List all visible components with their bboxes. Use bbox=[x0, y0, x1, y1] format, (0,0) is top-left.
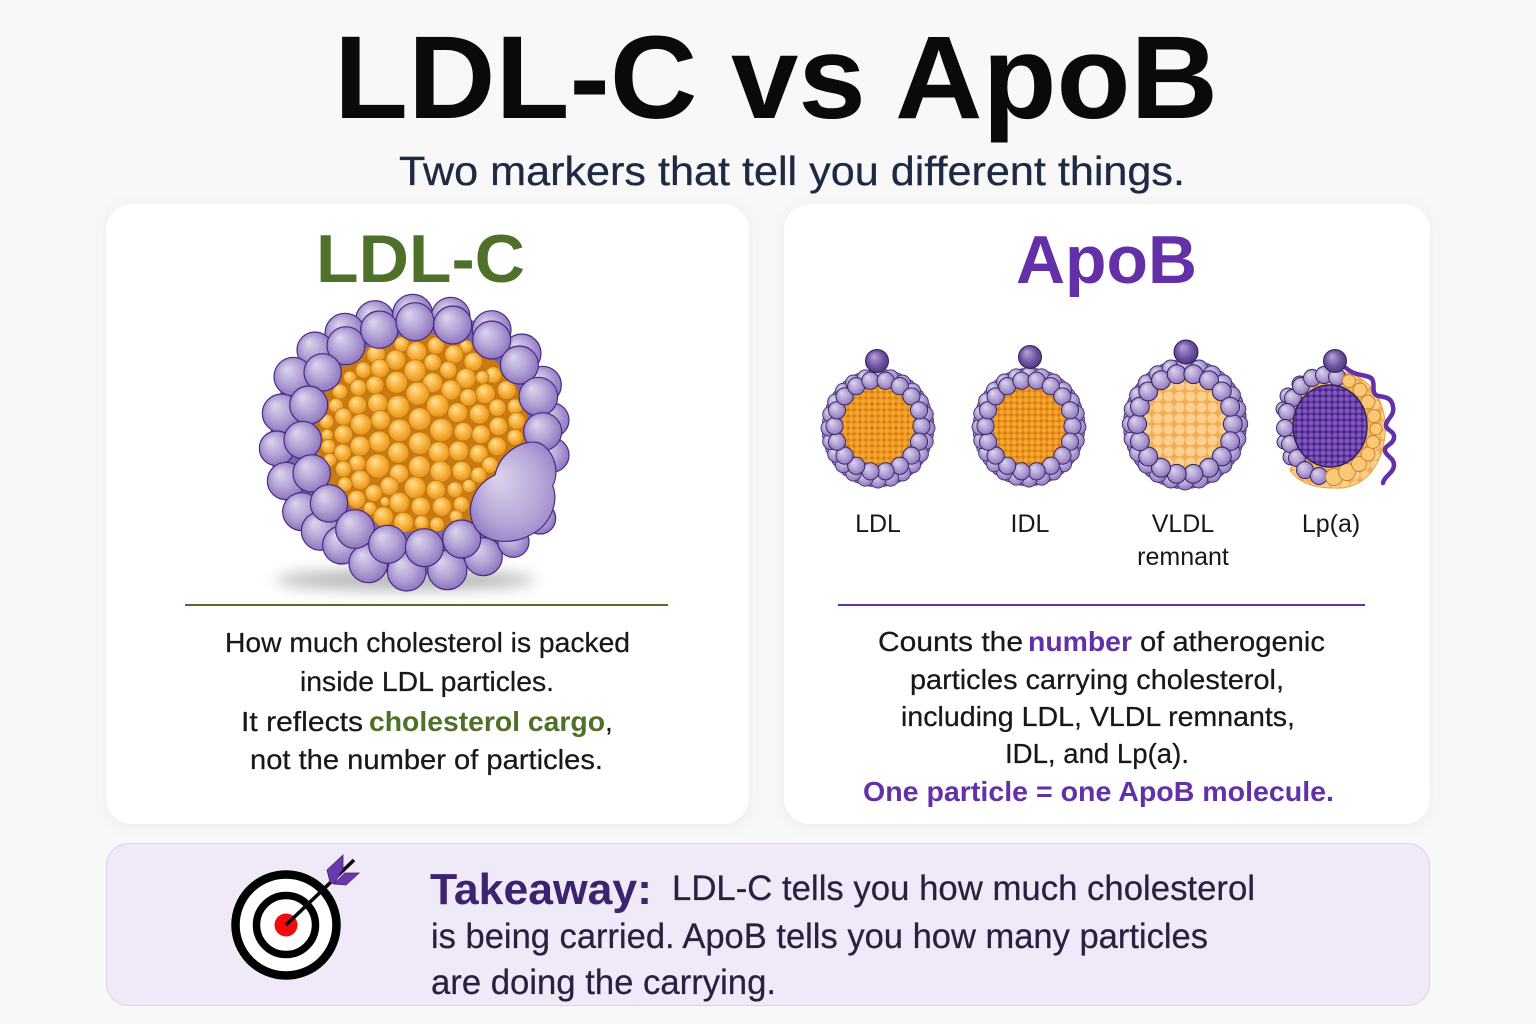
subtitle: Two markers that tell you different things. bbox=[399, 148, 1185, 194]
takeaway text: Takeaway: bbox=[430, 865, 652, 914]
panel heading: LDL-C: LDL-C bbox=[316, 221, 525, 297]
banner background bbox=[106, 844, 1430, 1006]
description: LDL-C: inside LDL particles. bbox=[300, 666, 554, 697]
purple shell bbox=[1276, 366, 1346, 484]
particle backing disc bbox=[270, 308, 557, 575]
title: LDL-C vs ApoB bbox=[334, 12, 1218, 144]
orange cholesterol core bbox=[314, 334, 529, 533]
label: VLDL remnant bbox=[1137, 510, 1229, 571]
ground shadow bbox=[275, 571, 535, 589]
particle: Lp(a) bbox=[1276, 350, 1394, 488]
orange underlay bbox=[1287, 378, 1373, 474]
description: LDL-C: How much cholesterol is packed bbox=[225, 627, 630, 658]
outer phospholipid layer bbox=[259, 294, 569, 591]
orange shell beads bbox=[1326, 374, 1382, 486]
divider line: ApoB bbox=[838, 604, 1365, 606]
apo(a) tail bbox=[1346, 368, 1394, 483]
description: LDL-C bbox=[225, 627, 630, 775]
icon: target with arrow bbox=[236, 855, 359, 976]
takeaway text: are doing the carrying. bbox=[431, 963, 776, 1002]
label: Lp(a): Lp(a) bbox=[1302, 510, 1360, 538]
ApoB protein lobe bbox=[470, 442, 556, 541]
cholesterol balls bbox=[319, 337, 525, 532]
description: LDL-C: not the number of particles. bbox=[250, 744, 603, 775]
description: ApoB: IDL, and Lp(a). bbox=[1005, 738, 1189, 769]
description: ApoB: Counts the bbox=[878, 626, 1023, 657]
label: IDL: IDL bbox=[1011, 510, 1050, 538]
label: LDL: LDL bbox=[855, 510, 901, 538]
takeaway text bbox=[430, 865, 1255, 1002]
inner phospholipid layer bbox=[284, 303, 562, 567]
description: ApoB: particles carrying cholesterol, bbox=[910, 664, 1284, 695]
description: ApoB: including LDL, VLDL remnants, bbox=[901, 701, 1295, 732]
description: LDL-C: cholesterol cargo bbox=[369, 706, 605, 737]
description: LDL-C: It reflects bbox=[241, 706, 363, 737]
illustration: LDL particle bbox=[259, 294, 569, 591]
description: ApoB bbox=[863, 626, 1334, 807]
card background bbox=[106, 204, 749, 824]
description: LDL-C: , bbox=[605, 706, 613, 737]
takeaway text: is being carried. ApoB tells you how many particles bbox=[431, 917, 1208, 956]
label: VLDL remnant: remnant bbox=[1137, 543, 1229, 571]
card background bbox=[784, 204, 1430, 824]
particle: VLDL remnant bbox=[1116, 340, 1254, 496]
orange lipid crescent bbox=[1290, 372, 1385, 488]
panel heading: ApoB: ApoB bbox=[1016, 222, 1197, 298]
particle: IDL bbox=[966, 346, 1092, 493]
description: ApoB: number bbox=[1028, 626, 1132, 657]
takeaway text: LDL-C tells you how much cholesterol bbox=[672, 869, 1255, 908]
ApoB ball bbox=[1324, 350, 1346, 372]
panel: ApoB bbox=[784, 204, 1430, 824]
divider line: LDL-C bbox=[185, 604, 668, 606]
panel: LDL-C bbox=[106, 204, 749, 824]
label: VLDL remnant: VLDL bbox=[1152, 510, 1214, 538]
purple shell back bbox=[1276, 376, 1308, 465]
purple core bbox=[1293, 385, 1367, 467]
description: ApoB: of atherogenic bbox=[1140, 626, 1325, 657]
description: ApoB: One particle = one ApoB molecule. bbox=[863, 776, 1334, 807]
particle: LDL bbox=[815, 350, 941, 494]
panel: takeaway banner bbox=[106, 844, 1430, 1006]
